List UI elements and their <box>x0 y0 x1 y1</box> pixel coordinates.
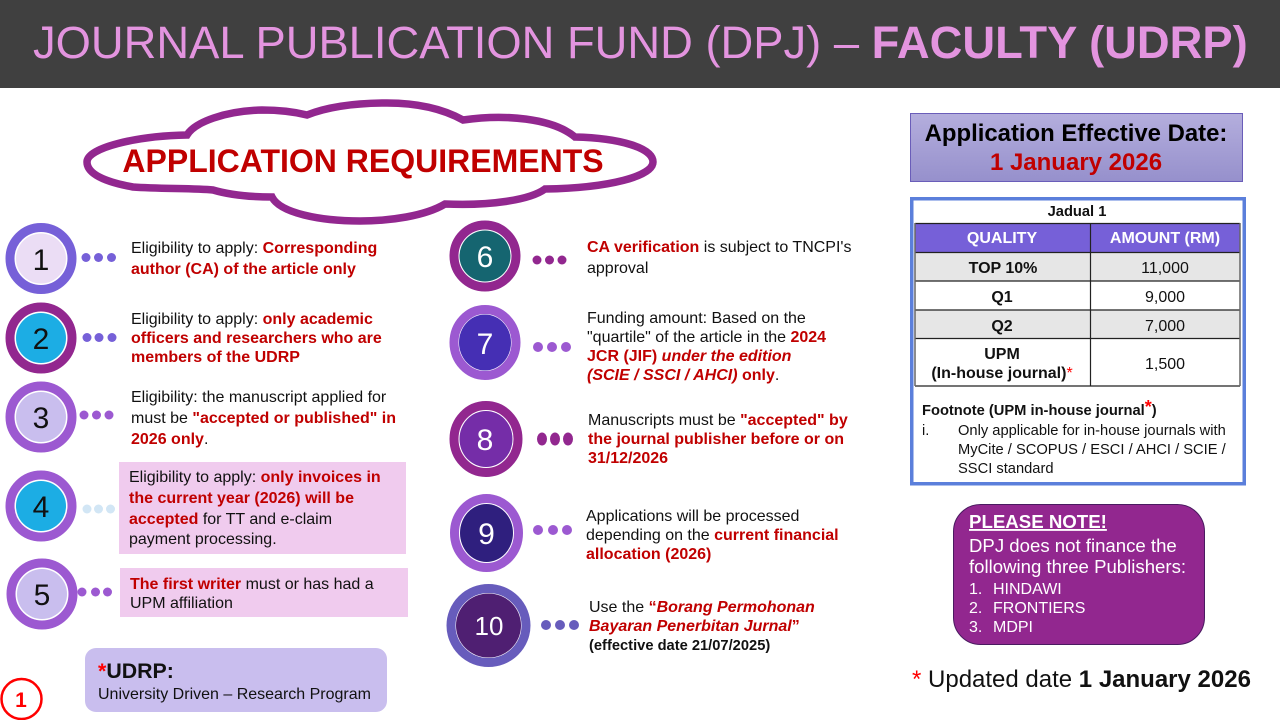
updated date note: * Updated date 1 January 2026 <box>912 666 1251 693</box>
funding table: 7,000 <box>1145 318 1185 335</box>
udrp definition box <box>85 648 387 712</box>
requirement 2: 2 <box>33 323 49 356</box>
requirement 1 <box>10 228 377 290</box>
heading: application requirements cloud <box>87 103 653 221</box>
funding table: QUALITY <box>967 230 1037 247</box>
requirement 10: (effective date 21/07/2025) <box>589 638 770 654</box>
footnote: MyCite / SCOPUS / ESCI / AHCI / SCIE / <box>958 442 1227 458</box>
requirement 4: 4 <box>33 491 49 524</box>
requirement 5: UPM affiliation <box>130 595 233 612</box>
title banner: JOURNAL PUBLICATION FUND (DPJ) – FACULTY (UDRP) <box>33 17 1248 68</box>
requirement 9: allocation (2026) <box>586 546 711 563</box>
footnote: * <box>1145 397 1152 417</box>
requirement 4: the current year (2026) will be <box>129 490 354 507</box>
funding table <box>915 223 1240 386</box>
requirement 1: author (CA) of the article only <box>131 261 356 278</box>
funding table: 11,000 <box>1141 260 1189 277</box>
application effective date box <box>910 114 1242 182</box>
requirement 2: Eligibility to apply: only academic <box>131 311 373 328</box>
callout: please note: following three Publishers: <box>969 556 1186 577</box>
requirement 1: 1 <box>33 244 49 277</box>
requirement 4: accepted for TT and e-claim <box>129 511 332 528</box>
requirement 6: approval <box>587 260 648 277</box>
funding table: Q1 <box>991 289 1013 306</box>
callout: please note: DPJ does not finance the <box>969 535 1177 556</box>
requirement 9: Applications will be processed <box>586 508 799 525</box>
requirement 4 <box>10 462 406 554</box>
requirement 8 <box>454 406 848 472</box>
requirement 3: 2026 only. <box>131 431 208 448</box>
footnote: Footnote (UPM in-house journal <box>922 403 1145 419</box>
requirement 6 <box>454 225 851 287</box>
requirement 9: 9 <box>478 518 495 551</box>
application effective date box: Application Effective Date: <box>925 120 1227 147</box>
requirement 7: (SCIE / SSCI / AHCI) only. <box>587 367 779 384</box>
funding table: (In-house journal)* <box>931 365 1073 382</box>
udrp definition box: *UDRP: <box>98 659 174 683</box>
requirement 8: 8 <box>477 424 493 457</box>
callout: please note: 2. <box>969 600 982 617</box>
callout: please note: MDPI <box>993 619 1033 636</box>
requirement 9: depending on the current financial <box>586 527 839 544</box>
title banner <box>0 0 1280 88</box>
application effective date box: 1 January 2026 <box>990 149 1162 176</box>
heading: application requirements cloud: APPLICATION REQUIREMENTS <box>122 143 604 179</box>
callout: please note: PLEASE NOTE! <box>969 511 1107 532</box>
funding table: Q2 <box>991 318 1013 335</box>
udrp definition box: University Driven – Research Program <box>98 686 371 703</box>
requirement 8: Manuscripts must be "accepted" by <box>588 412 848 429</box>
funding table: AMOUNT (RM) <box>1110 230 1220 247</box>
requirement 7 <box>454 310 826 384</box>
requirement 4: Eligibility to apply: only invoices in <box>129 469 381 486</box>
requirement 7: "quartile" of the article in the 2024 <box>587 329 826 346</box>
requirement 10 <box>451 588 815 662</box>
requirement 3 <box>10 386 396 448</box>
requirement 3: Eligibility: the manuscript applied for <box>131 389 387 406</box>
callout: please note: FRONTIERS <box>993 600 1085 617</box>
requirement 3: 3 <box>33 402 49 435</box>
requirement 1: Eligibility to apply: Corresponding <box>131 240 377 257</box>
requirement 8: the journal publisher before or on <box>588 431 844 448</box>
table caption: Jadual 1 <box>1048 204 1106 220</box>
funding table: 9,000 <box>1145 289 1185 306</box>
callout: please note <box>954 504 1204 644</box>
requirement 3: must be "accepted or published" in <box>131 410 396 427</box>
footnote: i. <box>922 423 929 439</box>
funding table: TOP 10% <box>969 260 1037 277</box>
requirement 10: Use the “Borang Permohonan <box>589 599 815 616</box>
requirement 2 <box>10 307 382 369</box>
requirement 9 <box>454 498 839 568</box>
page number badge <box>2 679 42 719</box>
requirement 10: 10 <box>475 611 503 641</box>
requirement 7: JCR (JIF) under the edition <box>587 348 792 365</box>
requirement 2: members of the UDRP <box>131 349 300 366</box>
callout: please note: 1. <box>969 581 982 598</box>
requirement 8: 31/12/2026 <box>588 450 668 467</box>
requirement 6: 6 <box>477 241 493 274</box>
requirement 5: 5 <box>34 579 50 612</box>
footnote: SSCI standard <box>958 461 1054 477</box>
panel: funding table and footnote <box>912 199 1244 484</box>
requirement 2: officers and researchers who are <box>131 330 382 347</box>
requirement 10: Bayaran Penerbitan Jurnal” <box>589 618 800 635</box>
requirement 5: The first writer must or has had a <box>130 576 374 593</box>
callout: please note: HINDAWI <box>993 581 1062 598</box>
callout: please note: 3. <box>969 619 982 636</box>
requirement 6: CA verification is subject to TNCPI's <box>587 239 851 256</box>
requirement 7: 7 <box>477 328 493 361</box>
footnote: ) <box>1152 403 1157 419</box>
footnote: Only applicable for in-house journals with <box>958 423 1226 439</box>
funding table: 1,500 <box>1145 356 1185 373</box>
requirement 7: Funding amount: Based on the <box>587 310 806 327</box>
requirement 5 <box>11 563 408 625</box>
footnote <box>922 397 1227 477</box>
requirement 4: payment processing. <box>129 531 277 548</box>
page number badge: 1 <box>15 689 27 712</box>
funding table: UPM <box>984 346 1020 363</box>
